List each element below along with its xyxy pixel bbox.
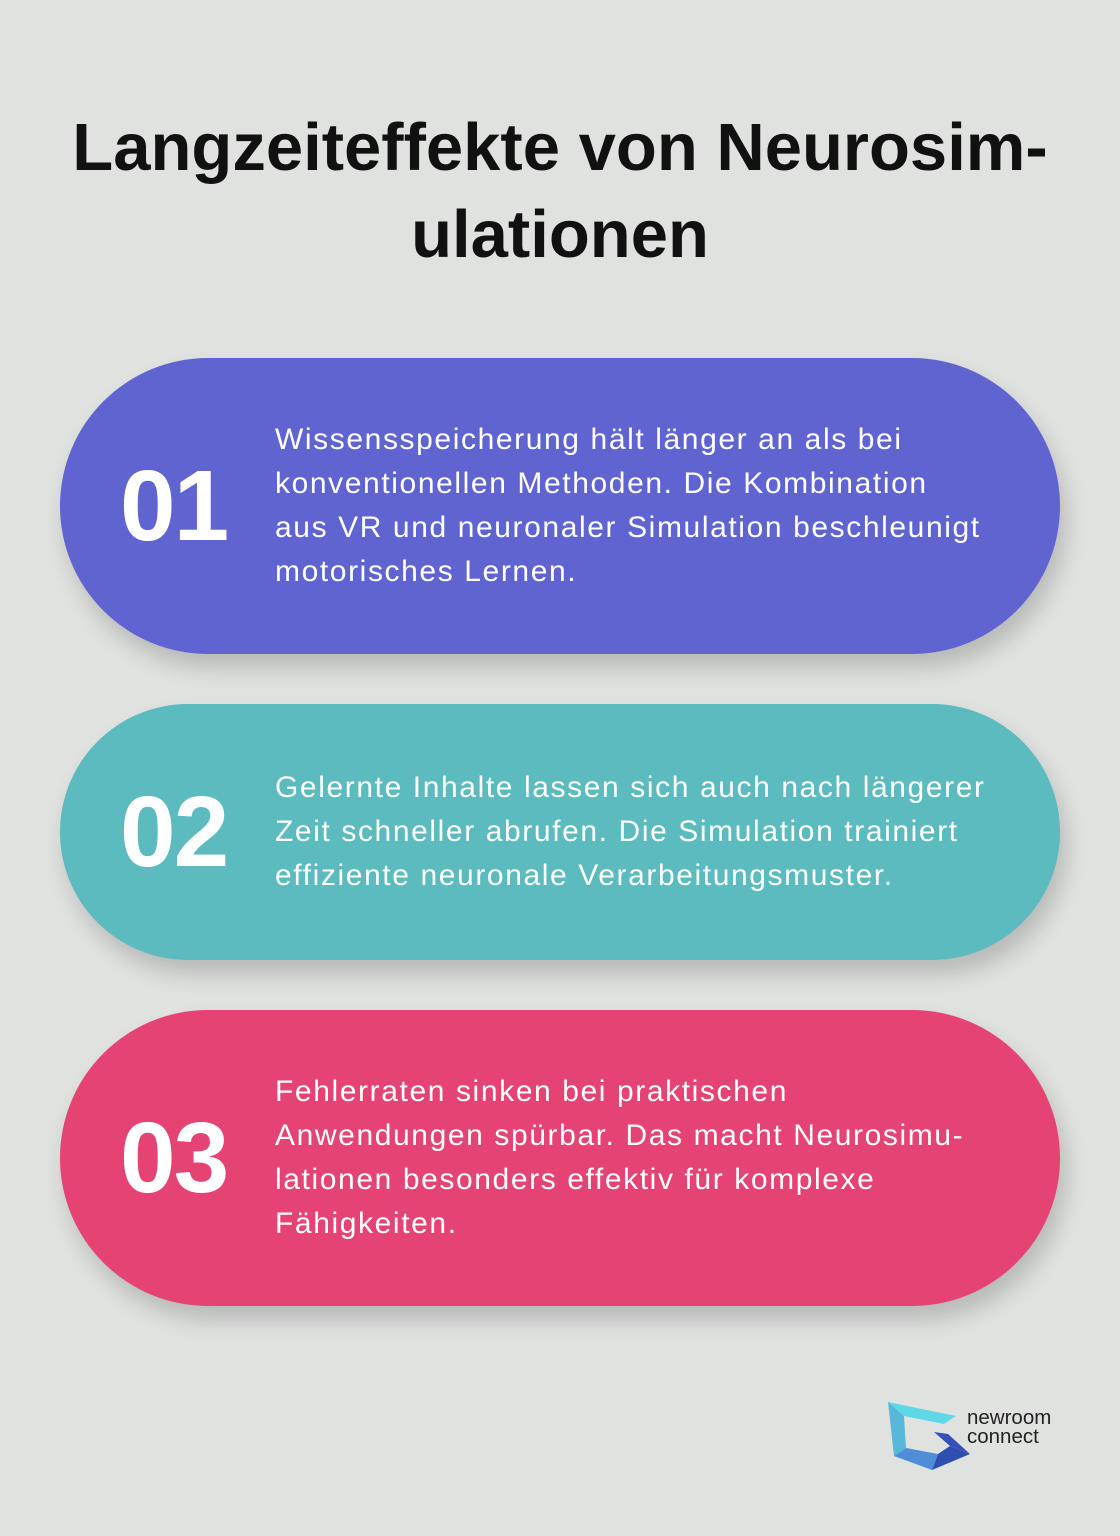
text block 02: Zeit schneller abrufen. Die Simulation trainiert [275, 815, 959, 848]
panel: card 01 [60, 358, 1060, 654]
title: Langzeiteffekte von Neurosim- [72, 110, 1048, 185]
text block 03: Fehlerraten sinken bei praktischen [275, 1075, 788, 1108]
icon: logo mark [888, 1402, 970, 1470]
text block 01: konventionellen Methoden. Die Kombination [275, 467, 928, 500]
logo text [967, 1406, 1051, 1448]
text block 01: motorisches Lernen. [275, 555, 577, 588]
text block 02 [275, 771, 986, 892]
logo [888, 1402, 1051, 1470]
text block 02: effiziente neuronale Verarbeitungsmuster. [275, 859, 894, 892]
text block 03: Anwendungen spürbar. Das macht Neurosimu- [275, 1119, 964, 1152]
text block 03: Fähigkeiten. [275, 1207, 458, 1240]
number 02: 02 [120, 776, 227, 888]
panel: card 02 [60, 704, 1060, 960]
text block 02: Gelernte Inhalte lassen sich auch nach längerer [275, 771, 986, 804]
panel: card 03 [60, 1010, 1060, 1306]
title: ulationen [411, 197, 709, 272]
number 01: 01 [120, 450, 227, 562]
number 03: 03 [120, 1102, 227, 1214]
title [72, 110, 1048, 272]
text block 01 [275, 423, 981, 588]
logo text: connect [967, 1425, 1039, 1448]
text block 01: aus VR und neuronaler Simulation beschleunigt [275, 511, 981, 544]
logo text: newroom [967, 1406, 1051, 1429]
text block 03: lationen besonders effektiv für komplexe [275, 1163, 875, 1196]
text block 03 [275, 1075, 964, 1240]
text block 01: Wissensspeicherung hält länger an als bei [275, 423, 903, 456]
